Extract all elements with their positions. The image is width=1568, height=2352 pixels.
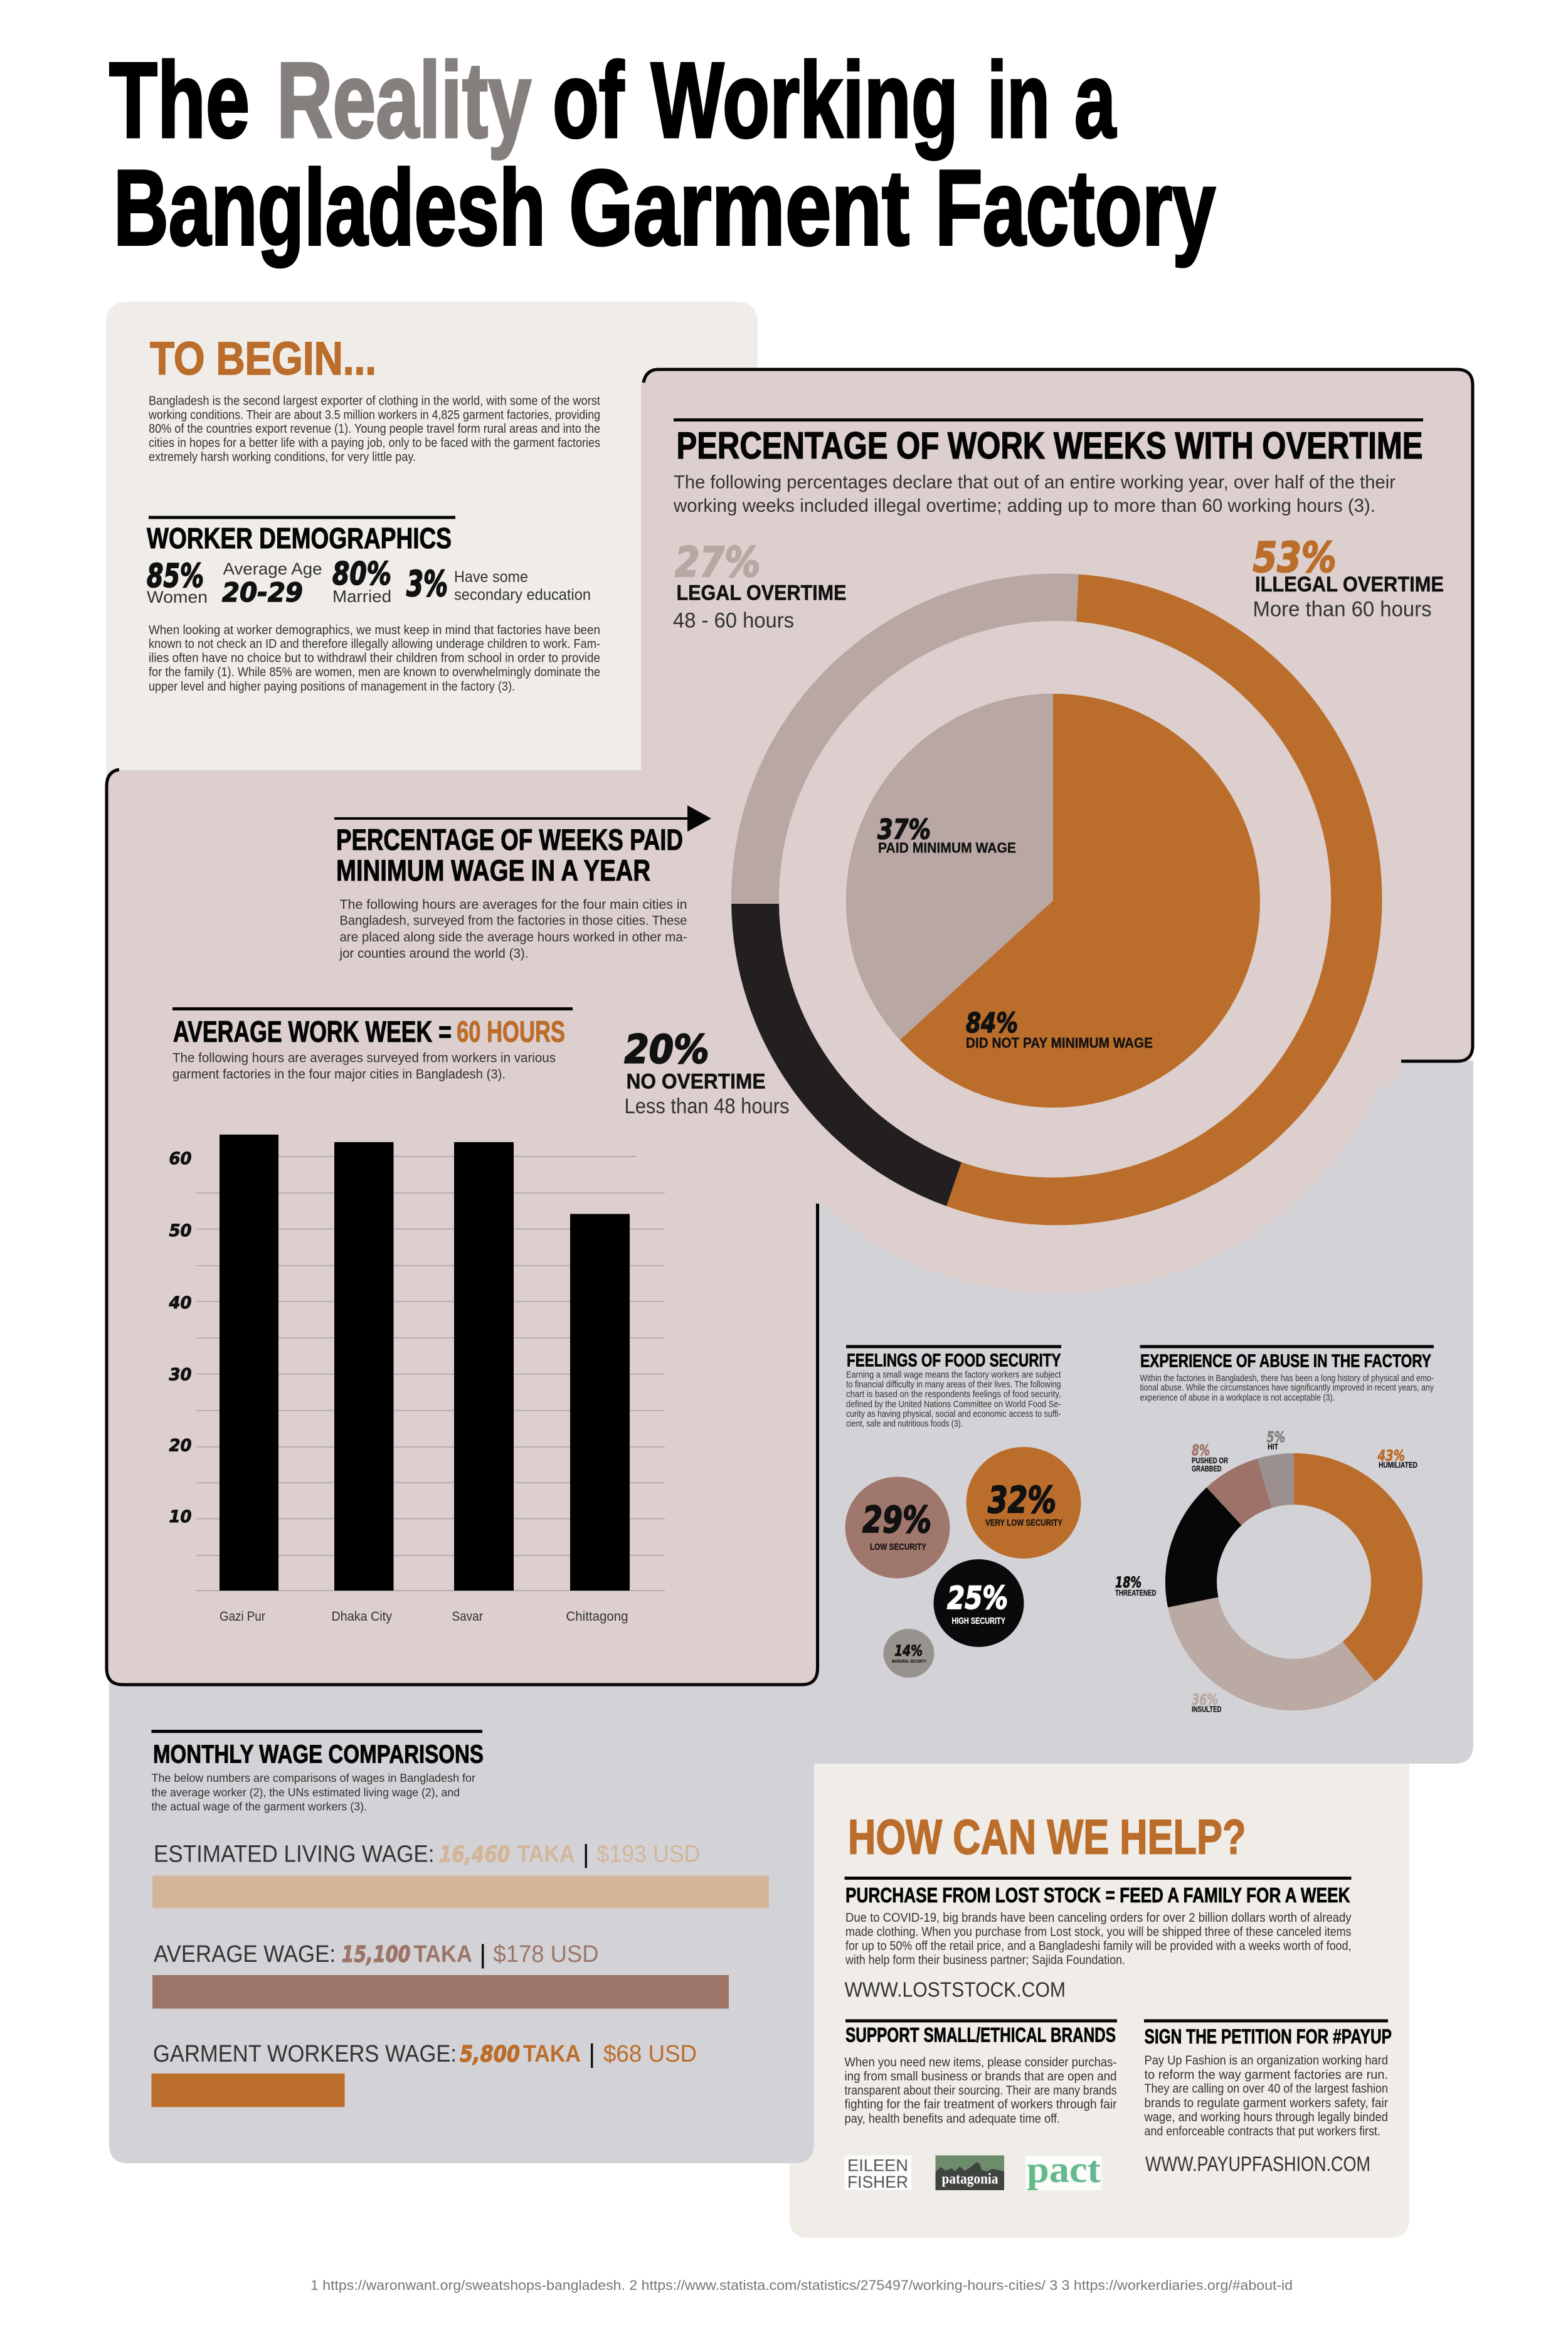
wage: average wage: $178 USD	[493, 1941, 598, 1968]
stat: women: 85%	[147, 558, 204, 595]
heading: average work week: AVERAGE WORK WEEK =	[173, 1015, 452, 1048]
panel: grey background	[109, 1061, 1473, 2163]
panel: pink overtime and work week background	[107, 369, 1473, 1685]
section: to begin	[148, 332, 600, 464]
text block: overtime intro: The following percentages declare that out of an entire working year, over half of the their	[674, 472, 1396, 493]
text block: food security: cient, safe and nutritious foods (3).	[846, 1419, 963, 1429]
label: 27% legal overtime: LEGAL OVERTIME	[676, 581, 847, 605]
text block: support small brands: ing from small business or brands that are open and	[844, 2070, 1116, 2084]
bar: garment wage	[152, 2074, 345, 2107]
wage: estimated living wage	[152, 1841, 769, 1908]
text block: petition: and enforceable contracts that put workers first.	[1144, 2125, 1380, 2139]
label: 8% pushed or grabbed: PUSHED OR	[1192, 1456, 1228, 1465]
wage: garment workers wage: $68 USD	[603, 2041, 697, 2067]
text block: support small brands	[844, 2056, 1117, 2126]
axis labels: 30	[169, 1365, 192, 1385]
text block: demographics note: When looking at worker demographics, we must keep in mind that factories have been	[149, 623, 600, 637]
text block: support small brands: pay, health benefits and adequate time off.	[844, 2112, 1060, 2126]
text block: minimum wage note	[339, 898, 687, 961]
bar: Chittagong	[570, 1214, 630, 1591]
text block: lost stock: with help form their business partner; Sajida Foundation.	[845, 1953, 1125, 1967]
bar: Dhaka City	[334, 1142, 394, 1591]
title: Garment	[569, 148, 909, 268]
label: 8% pushed or grabbed	[1192, 1441, 1228, 1473]
label: 8% pushed or grabbed: GRABBED	[1192, 1464, 1222, 1473]
heading: worker demographics: WORKER DEMOGRAPHICS	[147, 522, 452, 554]
text block: intro: Bangladesh is the second largest exporter of clothing in the world, with some of the worst	[149, 394, 600, 408]
logo: patagonia: patagonia	[942, 2171, 999, 2188]
label: 84% did not pay minimum wage	[966, 1007, 1153, 1051]
heading: to begin: TO BEGIN...	[150, 332, 376, 384]
section: percentage of weeks paid minimum wage	[336, 823, 687, 961]
bubble: 32% very low security: VERY LOW SECURITY	[985, 1518, 1062, 1528]
label: 43% humiliated: 43%	[1377, 1447, 1405, 1465]
bubble: 25% high security	[933, 1559, 1024, 1647]
text block: minimum wage note: The following hours are averages for the four main cities in	[340, 898, 687, 912]
axis labels: 10	[169, 1507, 192, 1527]
text block: intro: 80% of the countries export revenue (1). Young people travel form rural areas and into the	[149, 422, 600, 436]
wage: average wage: 15,100	[341, 1942, 410, 1968]
stat: secondary education	[406, 564, 591, 605]
label: 37% paid minimum wage: PAID MINIMUM WAGE	[878, 839, 1016, 856]
heading: weeks paid minimum wage: MINIMUM WAGE IN A YEAR	[336, 854, 650, 887]
section: monthly wage comparisons	[152, 1730, 484, 1813]
section: feelings of food security	[846, 1345, 1061, 1429]
text block: demographics note	[149, 623, 600, 694]
category labels: Savar	[452, 1609, 483, 1624]
wage: estimated living wage: $193 USD	[597, 1841, 700, 1868]
chart: abuse donut	[1165, 1453, 1422, 1710]
heading: abuse: EXPERIENCE OF ABUSE IN THE FACTORY	[1140, 1351, 1431, 1371]
label: 37% paid minimum wage	[877, 814, 1016, 856]
text block: work week note: The following hours are averages surveyed from workers in various	[172, 1051, 556, 1065]
bubble: 29% low security	[845, 1476, 950, 1578]
label: 36% insulted	[1192, 1691, 1222, 1714]
text block: petition	[1144, 2053, 1388, 2139]
title: of	[553, 40, 625, 161]
heading: how can we help: HOW CAN WE HELP?	[848, 1809, 1246, 1864]
text block: demographics note: for the family (1). While 85% are women, men are known to overwhelmingly dominate the	[149, 665, 600, 679]
stat: secondary education: secondary education	[454, 586, 591, 603]
bubble: 32% very low security	[966, 1447, 1081, 1559]
wage: estimated living wage: TAKA	[517, 1841, 575, 1868]
text block: support small brands: fighting for the fair treatment of workers through fair	[844, 2097, 1117, 2111]
text block: abuse: tional abuse. While the circumstances have significantly improved in recent years, any	[1140, 1382, 1434, 1393]
text block: food security: chart is based on the respondents feelings of food security,	[846, 1389, 1061, 1400]
text block: intro: cities in hopes for a better life with a paying job, only to be faced with the garment factories	[149, 437, 600, 450]
text block: demographics note: upper level and higher paying positions of management in the factory (3).	[149, 680, 515, 694]
text block: minimum wage note: Bangladesh, surveyed from the factories in those cities. These	[340, 913, 687, 928]
stat: secondary education: Have some	[454, 568, 528, 586]
axis labels: 50	[169, 1221, 192, 1241]
wage: average wage: TAKA	[414, 1941, 472, 1968]
stat: average age: 20-29	[222, 577, 303, 608]
text block: demographics note: ilies often have no choice but to withdrawl their children from school in order to provide	[149, 651, 600, 665]
text block: petition: Pay Up Fashion is an organization working hard	[1144, 2053, 1388, 2067]
text block: wage note: the average worker (2), the UNs estimated living wage (2), and	[152, 1786, 460, 1799]
title: Reality	[277, 40, 531, 161]
text block: work week note	[172, 1051, 556, 1081]
text block: demographics note: known to not check an ID and therefore illegally allowing underage children to work. Fam-	[149, 637, 600, 651]
text block: food security: defined by the United Nations Committee on World Food Se-	[846, 1399, 1061, 1410]
label: 43% humiliated: HUMILIATED	[1379, 1460, 1417, 1470]
text block: overtime intro: working weeks included illegal overtime; adding up to more than 60 working hours (3).	[673, 495, 1375, 516]
label: 84% did not pay minimum wage: 84%	[966, 1007, 1018, 1039]
bubble: 14% marginal security: 14%	[894, 1642, 923, 1660]
heading: sign the petition: SIGN THE PETITION FOR #PAYUP	[1144, 2025, 1392, 2048]
bubble: 25% high security: 25%	[947, 1580, 1008, 1616]
heading: food security: FEELINGS OF FOOD SECURITY	[847, 1351, 1061, 1371]
text block: lost stock: for up to 50% off the retail price, and a Bangladeshi family will be provided with a weeks worth of food,	[845, 1939, 1351, 1953]
logo: pact: pact	[1027, 2149, 1101, 2190]
label: 20% no overtime: NO OVERTIME	[626, 1070, 765, 1094]
category labels	[220, 1609, 628, 1624]
text block: food security: to financial difficulty in many areas of their lives. The following	[846, 1379, 1061, 1390]
section: average work week	[172, 1007, 573, 1081]
text block: minimum wage note: are placed along side the average hours worked in other ma-	[340, 930, 687, 945]
bar: Savar	[454, 1142, 514, 1591]
title: Working	[651, 40, 958, 161]
text block: intro	[148, 394, 600, 464]
wage: garment workers wage: TAKA	[523, 2041, 581, 2067]
text block: intro: working conditions. Their are about 3.5 million workers in 4,825 garment factories, providing	[148, 408, 600, 422]
bar: living wage	[152, 1875, 769, 1908]
text block: food security: curity as having physical, social and economic access to suffi-	[846, 1409, 1061, 1419]
axis labels: 20	[169, 1436, 192, 1455]
text block: lost stock: Due to COVID-19, big brands have been canceling orders for over 2 billion dollars worth of already	[845, 1911, 1351, 1925]
title: Bangladesh	[114, 148, 546, 268]
bubble: 14% marginal security: MARGINAL SECURITY	[892, 1660, 926, 1664]
label: 53% illegal overtime: More than 60 hours	[1253, 597, 1431, 621]
stat: women: Women	[147, 588, 208, 607]
heading: percentage of work weeks with overtime: PERCENTAGE OF WORK WEEKS WITH OVERTIME	[676, 425, 1422, 467]
label: 36% insulted: 36%	[1192, 1691, 1218, 1708]
text block: abuse: Within the factories in Bangladesh, there has been a long history of physical and emo-	[1140, 1373, 1434, 1384]
text block: petition: They are calling on over 40 of the largest fashion	[1144, 2082, 1388, 2096]
label: 43% humiliated	[1377, 1447, 1417, 1470]
bar: Gazi Pur	[220, 1135, 278, 1591]
text block: intro: extremely harsh working conditions, for very little pay.	[149, 450, 416, 464]
logo: Eileen Fisher	[844, 2155, 912, 2191]
label: 8% pushed or grabbed: 8%	[1192, 1441, 1210, 1459]
heading: weeks paid minimum wage: PERCENTAGE OF WEEKS PAID	[336, 823, 683, 856]
heading: monthly wage comparisons: MONTHLY WAGE COMPARISONS	[153, 1740, 484, 1769]
axis labels: 40	[169, 1293, 192, 1313]
title: Factory	[935, 148, 1216, 268]
text block: wage note: The below numbers are comparisons of wages in Bangladesh for	[152, 1772, 475, 1784]
label: 27% legal overtime: 27%	[675, 538, 760, 586]
bubble: 14% marginal security	[883, 1629, 935, 1678]
label: 37% paid minimum wage: 37%	[877, 814, 931, 845]
label: 18% threatened	[1115, 1574, 1157, 1597]
title	[109, 40, 1216, 268]
panel: how can we help background	[790, 1756, 1409, 2238]
bubble: 29% low security: 29%	[862, 1498, 931, 1541]
stat: married	[332, 556, 391, 606]
text block: overtime intro	[673, 472, 1396, 516]
text block: food security	[846, 1370, 1061, 1429]
section: sign the petition	[1144, 2020, 1392, 2175]
wage: garment workers wage: 5,800	[460, 2042, 520, 2067]
category labels: Gazi Pur	[220, 1609, 265, 1624]
heading: average work week: 60 HOURS	[457, 1015, 565, 1048]
chart: average work week bars	[169, 1135, 665, 1624]
heading: weeks paid minimum wage	[336, 823, 683, 887]
text block: wage note: the actual wage of the garment workers (3).	[152, 1800, 367, 1813]
label: 18% threatened: 18%	[1115, 1574, 1142, 1591]
label: 5% hit	[1267, 1429, 1285, 1451]
label: 53% illegal overtime: ILLEGAL OVERTIME	[1255, 573, 1444, 596]
stat: average age: Average Age	[223, 559, 322, 578]
label: 5% hit: 5%	[1267, 1429, 1285, 1446]
wage: garment workers wage	[152, 2041, 697, 2107]
text block: food security: Earning a small wage means the factory workers are subject	[846, 1370, 1061, 1380]
text block: lost stock	[845, 1911, 1351, 1967]
title: The	[109, 40, 250, 161]
label: 36% insulted: INSULTED	[1192, 1705, 1222, 1714]
section: experience of abuse	[1140, 1345, 1434, 1403]
label: 20% no overtime: Less than 48 hours	[625, 1094, 789, 1118]
footnote: sources: 1 https://waronwant.org/sweatshops-bangladesh. 2 https://www.statista.com/statistics/275497/working-hours-cities/ 3 3 https://workerdiaries.org/#about-id	[310, 2277, 1293, 2293]
stat: women	[147, 558, 208, 607]
chart: minimum wage pie	[846, 694, 1260, 1108]
panel border: work week	[107, 770, 818, 1685]
label: 5% hit: HIT	[1268, 1442, 1278, 1451]
panel border: overtime	[644, 369, 1473, 1061]
link: payupfashion: WWW.PAYUPFASHION.COM	[1145, 2153, 1370, 2175]
bubble: 29% low security: LOW SECURITY	[870, 1542, 926, 1552]
label: 27% legal overtime: 48 - 60 hours	[673, 608, 794, 632]
stat: secondary education: 3%	[406, 564, 448, 605]
text block: petition: to reform the way garment factories are run.	[1144, 2069, 1388, 2082]
label: 20% no overtime	[625, 1026, 789, 1118]
label: 53% illegal overtime: 53%	[1253, 533, 1336, 582]
label: 27% legal overtime	[673, 538, 847, 632]
chart: overtime donut ring	[731, 573, 1382, 1225]
wage: average wage	[152, 1941, 729, 2008]
stat: married: 80%	[332, 556, 391, 592]
title: in	[987, 40, 1050, 161]
bar: average wage	[152, 1975, 729, 2008]
section: overtime heading	[673, 418, 1423, 516]
wage: estimated living wage: 16,460	[439, 1841, 511, 1868]
axis labels: 60	[169, 1149, 192, 1168]
category labels: Dhaka City	[331, 1609, 392, 1624]
wage: estimated living wage: ESTIMATED LIVING WAGE:	[154, 1841, 434, 1868]
label: 20% no overtime: 20%	[625, 1026, 709, 1073]
link: loststock: WWW.LOSTSTOCK.COM	[844, 1978, 1066, 2001]
logo: Eileen Fisher: FISHER	[847, 2173, 908, 2191]
label: 84% did not pay minimum wage: DID NOT PAY MINIMUM WAGE	[966, 1035, 1153, 1051]
logo: patagonia	[936, 2155, 1004, 2190]
text block: wage note	[152, 1772, 475, 1813]
section: worker demographics	[147, 516, 600, 694]
stat: average age	[222, 559, 322, 608]
text block: support small brands: When you need new items, please consider purchas-	[844, 2056, 1116, 2070]
bubble: 25% high security: HIGH SECURITY	[952, 1616, 1005, 1626]
text block: abuse: experience of abuse in a workplace is not acceptable (3).	[1140, 1392, 1335, 1403]
bubble: 32% very low security: 32%	[988, 1479, 1056, 1522]
label: 18% threatened: THREATENED	[1115, 1588, 1157, 1597]
text block: petition: wage, and working hours through legally binded	[1144, 2111, 1388, 2124]
axis labels	[169, 1149, 192, 1527]
text block: support small brands: transparent about their sourcing. Their are many brands	[844, 2084, 1116, 2097]
section: support small brands	[844, 2020, 1117, 2126]
text block: lost stock: made clothing. When you purchase from Lost stock, you will be shipped three of these canceled items	[845, 1926, 1351, 1939]
arrow: to minimum wage pie	[334, 805, 711, 832]
text block: petition: brands to regulate garment workers safety, fair	[1144, 2096, 1388, 2110]
title: a	[1074, 40, 1116, 161]
section: how can we help	[844, 1809, 1351, 2001]
wage: average wage: AVERAGE WAGE:	[154, 1941, 336, 1968]
heading: lost stock: PURCHASE FROM LOST STOCK = FEED A FAMILY FOR A WEEK	[845, 1883, 1350, 1907]
wage: garment workers wage: GARMENT WORKERS WAGE:	[153, 2041, 457, 2067]
text block: abuse	[1140, 1373, 1434, 1403]
stat: married: Married	[332, 587, 391, 606]
panel: to begin background	[106, 302, 758, 803]
text block: minimum wage note: jor counties around the world (3).	[339, 946, 528, 961]
label: 53% illegal overtime	[1253, 533, 1444, 621]
heading: support small brands: SUPPORT SMALL/ETHICAL BRANDS	[845, 2023, 1116, 2046]
category labels: Chittagong	[566, 1609, 628, 1624]
logo: Eileen Fisher: EILEEN	[847, 2156, 908, 2175]
text block: work week note: garment factories in the four major cities in Bangladesh (3).	[172, 1067, 506, 1081]
